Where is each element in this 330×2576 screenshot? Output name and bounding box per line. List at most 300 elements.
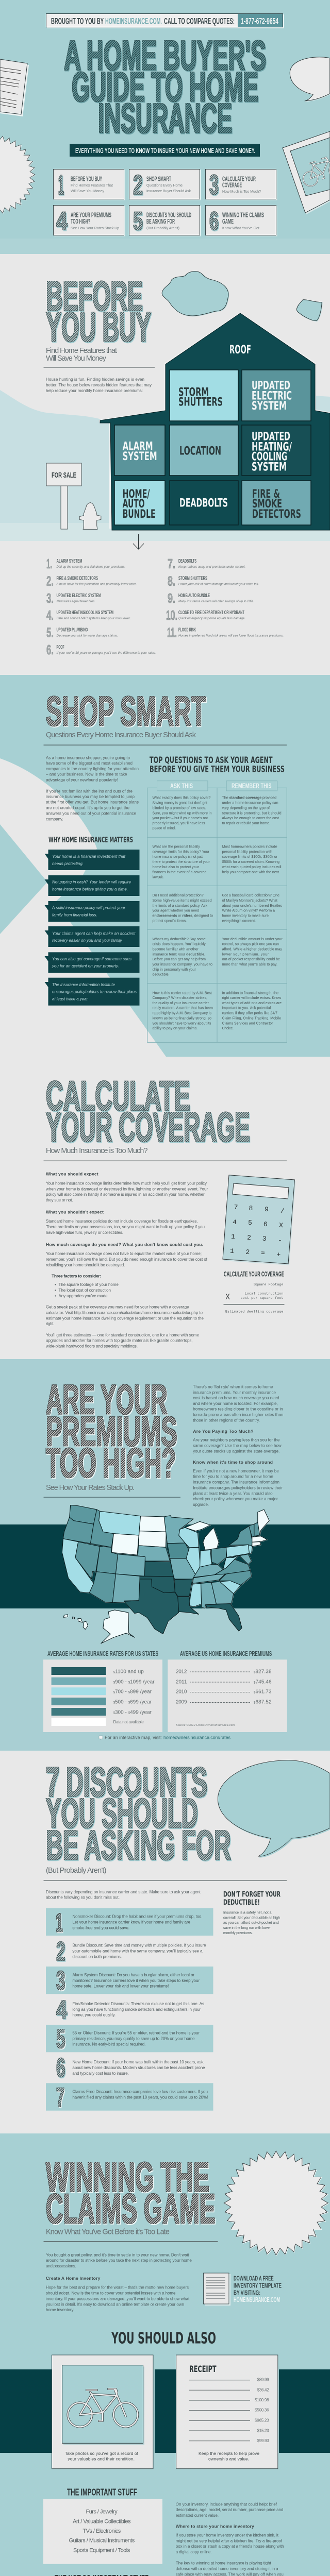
article text: The local cost of construction [59,1288,111,1293]
article text: Get a sneak peak at the coverage you may need for your home with a coverage [46,1305,189,1310]
heading: shop smart: SHOP SMART [46,688,206,735]
callout 3: family from financial loss. [52,912,97,917]
table row 1: your pocket – but if your home's not [153,817,208,820]
equation: calculate your coverage: Square Footage [254,1283,283,1286]
table row 2: finances in the event of a covered [153,871,206,874]
icon: calculator: 6 [263,1221,268,1228]
article text: How much coverage do you need? What you don't know could cost you. [46,1242,203,1247]
sidebar: don't forget your deductible: Insurance is a safety net, not a [223,1911,272,1914]
section background: premiums [0,1359,330,1751]
list item 3: UPDATED ELECTRIC SYSTEM [57,592,101,599]
interactive map link: For an interactive map, visit: [105,1735,162,1740]
table row 1 [153,796,282,831]
table row 4 [153,938,283,977]
callout: download inventory template: INVENTORY TEMPLATE [234,2282,282,2290]
intro text: – and your business. Now is the time to take [46,772,127,777]
card: receipt: RECEIPT [189,2364,217,2375]
table row 3: Got a baseball card collection? One [222,894,279,897]
equation: calculate your coverage [224,1270,285,1314]
table row 3 [153,894,283,923]
discount 5 [46,2024,213,2054]
right column text: defense with a detailed home inventory and storing it in a [176,2566,278,2571]
legend: average rates for states: $500 - $699 /year [113,1700,152,1705]
article text: wide-plank hardwood floors and specialty moldings. [45,1344,138,1349]
table row 5: Claims Services and Contractor [222,1022,273,1025]
discount 6: and typically cost less to insure. [72,2071,129,2076]
intro text: help reduce your monthly home insurance premiums: [46,388,143,393]
list item 9: Many insurance carriers will offer savings of up to 20%. [178,600,254,603]
list item 1 [46,556,125,571]
card: 3 calculate your coverage: 3 [209,170,219,200]
table row 1: vary depending on the type of [222,806,270,810]
intro text: advantage of your newfound popularity! [46,777,118,782]
article text: and where your home is located. For example, [193,1401,278,1406]
window: updated electric system: ELECTRIC [252,390,292,403]
heading: are your premiums too high: TOO HIGH? [46,1440,176,1486]
icon: calculator: - [278,1236,282,1244]
callout 3 [44,901,139,922]
section background: header [0,0,330,254]
discount 2: discount on both premiums. [72,1954,122,1959]
list item 11 [167,625,284,640]
icon: calculator: 2 [245,1248,250,1256]
table row 1: What exactly does this policy cover? [153,796,211,800]
for sale sign [46,463,81,529]
interactive map link [99,1735,231,1740]
equation: calculate your coverage: cost per square foot [240,1296,283,1300]
discount 5: insurance. No early-bird special required. [72,2042,145,2046]
list item 6: If your roof is 10 years or younger you'll see the difference in your rates. [57,652,156,655]
list item 5: UPDATED PLUMBING [57,627,88,633]
subheading [46,347,117,363]
article text: rebuilding your home should it be destroyed. [46,1263,125,1267]
table row 4: become familiar with another [153,947,199,951]
panel: discounts [43,1759,330,2112]
table row 5: you shouldn't have to worry about its [153,1022,211,1025]
table row 3: the limits of a standard policy. Ask [153,904,207,908]
table row 4: Before you can get any help from [153,958,206,961]
right column text: If you store your home inventory under the kitchen sink, it [176,2533,279,2537]
window: updated heating/cooling system [242,425,311,476]
list item 11: FLOOD RISK [178,627,196,633]
discount 4: 4 [56,1995,67,2024]
table row 4: deductible. [153,973,170,977]
article text: around for disaster to strike before you take the next step in protecting your home [46,2258,192,2263]
callout 5: You can also get coverage if someone sues [52,957,131,961]
card: take photos: your valuables and their condition. [68,2456,135,2462]
card: receipt: $89.99 [257,2378,269,2382]
list item 7: DEADBOLTS [178,558,196,564]
list item 5: 5. [46,625,54,640]
discount 4: Fire/Smoke Detector Discounts: There's no excuse not to get this one. As [72,2002,204,2006]
table row 5: really matters. A carrier that has been [153,1007,213,1010]
icon: small cloud [296,300,322,321]
discount 3 [46,1966,213,1996]
discount 4: home, you could qualify. [72,2013,116,2018]
callout 5 [44,952,139,973]
card: receipt: ownership and value. [208,2456,249,2462]
article text: you lost in detail. It's easy to download an online template or create your own [46,2302,184,2307]
card: 1 before you buy: 1 [58,170,64,200]
callout: download inventory template: BY VISITING: [234,2289,260,2296]
card: 5 discounts: BE ASKING FOR [146,217,175,225]
equation: calculate your coverage: X [225,1293,230,1301]
right column text: On your inventory, include anything that could help: brief [176,2502,277,2506]
heading: why home insurance matters: WHY HOME INSURANCE MATTERS [48,835,133,844]
heading: are your premiums too high [46,1377,177,1486]
ground band [0,523,330,541]
article text: There's no 'flat rate' when it comes to home [193,1384,273,1389]
panel: important stuff list: TVs / Electronics [82,2528,121,2534]
tab: ask this: ASK THIS [170,782,193,790]
card: 2 shop smart: SHOP SMART [146,175,171,182]
panel: important stuff list: Guitars / Musical Instruments [69,2538,135,2544]
window: updated heating/cooling system: HEATING/ [252,440,292,453]
section background: before you buy [0,254,330,675]
card: receipt: $965.23 [255,2418,269,2422]
table row 5: rated highly by A.M. Best Company is [153,1012,211,1015]
card: 6 winning the claims game: WINNING THE CLAIMS [222,211,264,219]
table row 1: peace of mind. [153,827,176,831]
list item 4: 4. [46,607,54,623]
heading: are your premiums too high: PREMIUMS [46,1409,177,1455]
label: roof: ROOF [229,344,251,357]
article text: Even if you're not a new homeowner, it may be [193,1469,279,1473]
window: alarm system: SYSTEM [123,450,157,463]
article text: right. [46,1321,54,1326]
table row 2: coverage limits of $100k, $300k or [222,855,278,859]
list item 8: 8. [168,573,175,588]
discount 7 [46,2082,213,2112]
list item 7 [168,556,245,571]
card: 5 discounts [129,205,201,236]
table row 5: In addition to financial strength, the [222,991,278,995]
callout 1: Your home is a financial investment that [52,854,126,859]
discount 3: monitored? Insurance carriers love it when you take steps to keep your [72,1978,200,1983]
callout 2 [44,875,139,896]
table row 4: control, so always pick one you can [222,943,279,946]
discount 6: New Home Discount: If your home was built within the past 10 years, ask [72,2060,204,2064]
intro text: companies in the country fighting for your attention [46,767,139,771]
table row 1: blinded by a promise of low rates. [153,806,206,810]
sidebar: don't forget your deductible: monthly premiums. [223,1931,253,1935]
window: alarm system [114,425,165,476]
article text: they sue or not. [46,1198,73,1202]
arrow down [133,534,144,549]
legend: average rates for states: $700 - $899 /year [113,1689,152,1695]
article text: have high-value furs, jewelry or collectibles. [46,1230,123,1235]
discount 7: 7 [56,2082,64,2112]
window: location [170,425,238,476]
panel: header [0,13,330,254]
list item 8: STORM SHUTTERS [178,575,207,581]
subheading: (But Probably Aren't) [46,1867,106,1875]
callout 6: encourages policyholders to review their plans [52,990,137,994]
table row 2: Most homeowners policies include [222,845,277,849]
callout 4: Your claims agent can help make an accident [52,931,136,936]
icon: bicycle [68,2389,138,2427]
callout 6: at least twice a year. [52,996,89,1001]
window: home/auto bundle: BUNDLE [123,508,156,521]
article text: Are your neighbors paying less than you for the [193,1438,280,1443]
section background: discounts [0,1751,330,2133]
intro text: House hunting is fun. Finding hidden savings is even [46,377,144,382]
table row 3: White Album on vinyl? Perform a [222,909,275,912]
window: home/auto bundle [114,481,165,525]
table: average us premiums: 2010 [176,1689,187,1695]
discount 5: 5 [56,2024,65,2054]
table row 4: lower your premium, your [222,953,269,956]
panel: shop smart [0,688,287,1057]
legend: average rates for states: Data not available [113,1720,144,1724]
list item 9: 9. [168,590,175,606]
table row 4: afford. While a higher deductible may [222,947,283,951]
article text: remember, you'll still own the land. But you do need enough insurance to cover the cost of [46,1257,208,1262]
article text: Any upgrades you've made [59,1294,108,1298]
discount 2 [56,1937,206,1967]
list item 11: 11. [167,625,177,640]
sidebar: don't forget your deductible: DON'T FORGET YOUR [223,1891,280,1899]
panel: winning the claims game [0,2151,330,2576]
article text: • [55,1294,56,1298]
card: receipt: $36.42 [257,2387,269,2393]
intro text: have some of the biggest and most established [46,761,133,766]
table row 1: always be enough to cover the cost [222,817,279,820]
card: 1 before you buy: BEFORE YOU BUY [71,175,102,182]
article text: tornado-prone areas often incur higher rates than [193,1412,283,1417]
icon: calculator [223,1175,295,1265]
heading: calculate your coverage: CALCULATE [46,1073,190,1120]
intro text: about the following so you don't miss out. [46,1895,120,1900]
section background: claims game [0,2133,330,2576]
list item 5 [46,625,118,640]
icon: calculator: = [261,1249,265,1257]
list item 6: 6. [46,642,54,657]
window: fire and smoke detectors: FIRE & [252,488,280,501]
callout stack: why insurance matters [44,850,139,1006]
window: deadbolts [170,481,238,525]
list item 2 [46,573,137,588]
panel: important stuff list: Sports Equipment / Tools [73,2547,130,2553]
section background: calculate coverage [0,1057,330,1359]
card: 6 winning the claims game: GAME [222,217,234,225]
table row 2: there to protect the structure of your [153,860,210,864]
article text: upgrade. [193,1502,209,1507]
icon: calculator: 1 [230,1247,234,1255]
tab: remember this: REMEMBER THIS [232,782,271,790]
table row 2: home insurance policy is not just [153,855,203,859]
card: receipt [176,2355,279,2470]
sidebar: don't forget your deductible: coverall. Set your deductible as high [223,1916,280,1920]
icon: polaroid with bicycle [283,131,330,214]
article text: cost is based on how much coverage you need [193,1396,279,1400]
window: deadbolts: DEADBOLTS [179,497,228,510]
table row 5: carriers if they offer perks like 24/7 [222,1012,277,1015]
list item 8 [168,573,259,588]
table row 5 [153,991,282,1030]
card: 4 are your premiums too high [54,205,125,236]
article text: You'll get three estimates — one for standard construction, one for a home with some [46,1333,200,1337]
table row 1: properly insured, you'll have less [153,822,205,825]
callout 4 [44,926,139,947]
list item 5: Decrease your risk for water damage claims. [57,635,118,638]
table row 1: structure it is protecting, but it should [222,811,282,815]
intro text: If you're not familiar with the ins and outs of the [46,789,133,793]
table row 5: ability to pay on your claims. [153,1027,197,1030]
window: home/auto bundle: HOME/ [123,488,150,501]
table row 3: Some high-value items might exceed [153,899,212,903]
section background: shop smart [0,675,330,1057]
card: 6 winning the claims game: Know What You've Got [222,227,259,230]
article text: Institute encourages policyholders to review their [193,1485,283,1490]
list item 10 [166,607,245,623]
discount 4: long as you have functioning smoke detectors and extinguishers in your [72,2007,201,2012]
article text: estimate your home insurance dwelling coverage requirement or use the equation to the [46,1316,204,1320]
banner: brought to you by: 1-877-672-9654 [241,16,278,26]
article text: policy will also come in handy if someone is injured in an accident in your home, whether [46,1192,205,1197]
tab: remember this [226,781,277,791]
dark band behind map [0,1524,330,1608]
card: take photos: Take photos so you've got a record of [65,2451,139,2456]
card: take photos [52,2355,155,2470]
right column text [176,2502,284,2576]
callout 4: recovery easier on you and your family. [52,938,123,943]
window: storm shutters: SHUTTERS [178,396,223,409]
card: 4 are your premiums too high: 4 [56,207,68,235]
table: ask this / remember this [147,781,287,1042]
callout: download inventory template: HOMEINSURANCE.COM [234,2296,280,2303]
tab: ask this [157,781,208,791]
article text: when your home is damaged or destroyed by fire, lightning or another covered event. Your [45,1187,208,1191]
article text: those in other regions of the country. [193,1418,260,1422]
icon: large speech bubble [218,1760,330,1856]
intro text: company. [46,817,63,821]
discount 3: home safe. Lower your risk and lower your premiums! [72,1984,169,1989]
card: receipt: $15.23 [257,2428,269,2433]
table: average us premiums: Source ©2012 HomeOwnersInsurance.com [176,1723,235,1727]
article text: should adopt. Now is the time to cover your potential losses with a home [46,2291,176,2295]
discount 2: 2 [56,1937,65,1967]
icon: calculator: X [279,1222,283,1229]
table row 4: insurance term: your deductible. [153,953,205,956]
window: updated heating/cooling system: UPDATED [252,431,290,444]
list item 6 [46,642,156,657]
subheading: Will Save You Money [46,354,107,363]
right column text: a digital copy online. [176,2550,212,2554]
list item 7: 7. [168,556,175,571]
callout 2: Not paying in cash? Your lender will require [52,880,131,885]
list item 9 [168,590,254,606]
table row 3: everything's covered. [222,919,256,923]
article text: Standard home insurance policies do not include coverage for floods or earthquakes. [46,1219,198,1224]
article text: home inventory. [46,2308,74,2312]
icon: large starburst [224,2151,328,2255]
article text: your quote stacks up against the state average. [193,1449,279,1454]
discount 7: Claims-Free Discount: Insurance companies love low-risk customers. If you [72,2089,208,2094]
banner: brought to you by: HOMEINSURANCE.COM. [105,16,162,26]
table row 5: known as being financially strong, so [153,1017,211,1021]
card: 5 discounts: (But Probably Aren't) [146,227,179,230]
discount 2: your automobile and home with the same company, you'll typically see a [72,1949,203,1954]
discount 1: Nonsmoker Discount: Drop the habit and see if your premiums drop, too. [72,1914,203,1919]
panel: before you buy [0,272,330,657]
table row 5: important to you. Ask potential [222,1007,271,1010]
article text: Your home insurance coverage limits determine how much help you'll get from your policy [46,1181,207,1185]
discount 6: 6 [56,2053,65,2083]
table row 2: what each quoted policy includes will [222,866,282,869]
article text: What you shouldn't expect [46,1209,104,1214]
decorative lighter band at bottom of header [0,239,330,254]
sidebar: don't forget your deductible: save in the long run with lower [223,1926,271,1930]
icon: calculator: 3 [262,1235,267,1243]
card: 3 calculate your coverage: How Much is Too Much? [222,190,261,194]
card: 6 winning the claims game: 6 [209,207,219,235]
table row 1: to repair or rebuild your home. [222,822,270,825]
house diagram [99,312,330,530]
article text [45,1172,208,1349]
sidebar: don't forget your deductible: DEDUCTIBLE! [223,1899,260,1907]
discount 3: Alarm System Discount: Do you have a burglar alarm, either local or [72,1973,194,1977]
discount 1: Let your home insurance carrier know if your home and family are [72,1920,191,1925]
card: 1 before you buy: Will Save You Money [71,190,104,193]
table row 5: Choice. [222,1027,234,1030]
article text: • [55,1288,56,1293]
list item 2: A must-have for fire prevention and potentially lower rates. [56,583,137,586]
for sale sign: FOR SALE [52,471,76,480]
legend: average rates for states: $1100 and up [113,1669,144,1675]
banner: brought to you by: BROUGHT TO YOU BY [51,16,104,26]
card: receipt: $500.36 [255,2408,269,2413]
list item 1: 1. [46,556,52,571]
roof and house body [99,312,330,529]
window: fire and smoke detectors [242,481,311,525]
heading: calculate your coverage [46,1073,250,1150]
card: 2 shop smart: Questions Every Home [146,184,183,188]
background hills [0,390,330,523]
callout 6: The Insurance Information Institute [52,982,116,987]
discount 6: about new home discounts. Modern structures can be less accident prone [72,2065,205,2070]
article text: insurance premiums. Your monthly insurance [193,1390,276,1395]
list item 7: Keep robbers away and premiums under control. [178,566,245,569]
article text: Create A Home Inventory [46,2276,101,2281]
callout 2: home insurance before giving you a dime. [52,887,128,892]
article text: The square footage of your home [59,1282,119,1287]
table row 4: Your deductible amount is under your [222,938,283,941]
list item 11: Homes in preferred flood risk areas will see lower flood insurance premiums. [178,635,284,638]
card: 5 discounts: DISCOUNTS YOU SHOULD [146,211,191,219]
heading: 7 discounts: YOU SHOULD [46,1790,198,1837]
window: updated electric system: SYSTEM [252,400,287,413]
table row 2: coverage limits for this policy? Your [153,850,210,854]
icon: speech bubble right [290,57,330,101]
discount 1 [46,1908,213,1938]
card: 4 are your premiums too high: See How Your Rates Stack Up [71,227,119,230]
article text: and possessions. [46,2264,76,2268]
table row 2: help you compare one with the next. [222,871,280,874]
intro text: answers you need out of your potential insurance [46,811,137,816]
article text: Know when it's time to shop around [193,1460,273,1465]
article text: calculator. Visit http://homeinsurance.com/calculators/home-insurance-calculator.php to [46,1310,203,1315]
subheading: Questions Every Home Insurance Buyer Should Ask [46,731,196,739]
icon: calculator: 5 [248,1219,252,1227]
intro text [46,755,139,821]
discount 2: Bundle Discount: Save time and money with multiple policies. If you insure [72,1943,206,1948]
table row 5: Company? When disaster strikes, [153,996,207,1000]
heading: 7 discounts: 7 DISCOUNTS [46,1759,207,1805]
card: receipt: $100.98 [255,2398,269,2402]
panel: important stuff list: Furs / Jewelry [86,2509,118,2515]
intro text: Discounts vary depending on insurance carrier and state. Make sure to ask your agent [46,1890,201,1894]
